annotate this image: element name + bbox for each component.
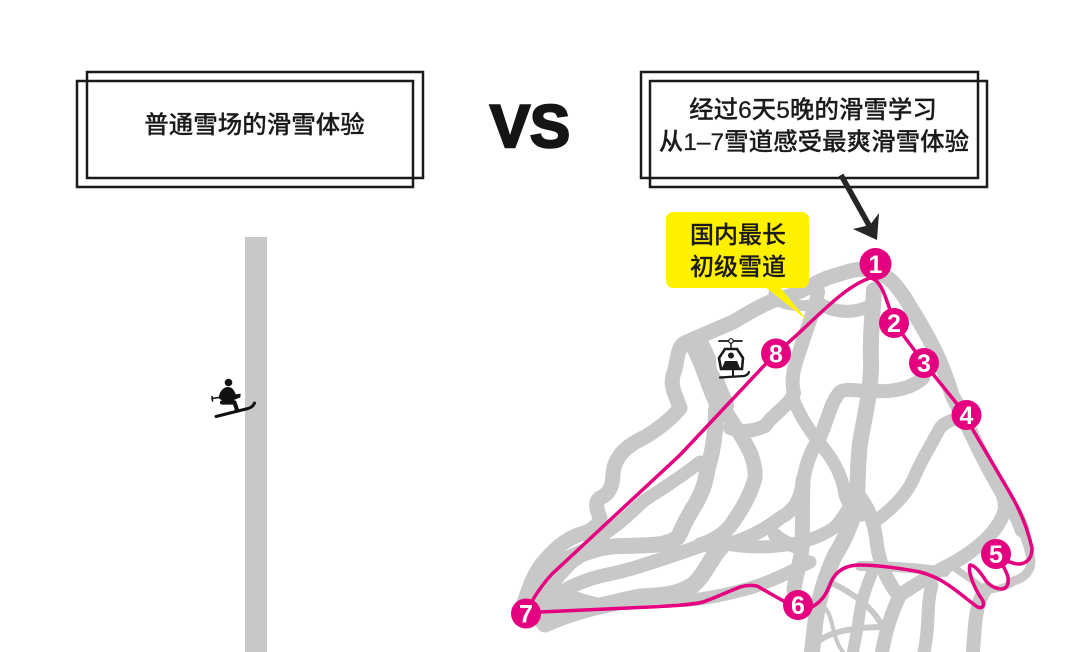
marker 4 [952,400,982,430]
panel: ordinary ski resort heading [77,72,423,187]
marker 8: 8 [769,340,783,368]
panel: six day course heading: 经过6天5晚的滑雪学习 [689,96,937,124]
marker 8 [761,338,791,368]
VS label: VS [490,93,570,160]
icon: gondola [716,339,749,381]
marker 3: 3 [917,350,931,378]
marker 7: 7 [519,600,533,628]
route: magenta ski route [526,278,1032,613]
callout: longest beginner trail: 初级雪道 [690,254,786,281]
marker 2: 2 [887,310,901,338]
marker 1: 1 [869,251,883,279]
marker 4: 4 [960,402,974,430]
panel: six day course heading [641,72,987,187]
marker 3 [909,348,939,378]
chart: ski trail network [523,269,1031,652]
panel: six day course heading: 从1–7雪道感受最爽滑雪体验 [659,128,969,156]
marker 5 [981,539,1011,569]
single grey ski slope [245,237,267,652]
marker 2 [879,308,909,338]
marker 1 [860,248,892,280]
marker 6: 6 [791,592,805,620]
marker 5: 5 [989,541,1003,569]
panel: ordinary ski resort heading: 普通雪场的滑雪体验 [144,111,365,139]
icon: skier [212,379,254,416]
marker 6 [783,590,813,620]
arrow: heading to trail start [841,175,879,240]
marker 7 [511,598,541,628]
callout: longest beginner trail [666,212,809,320]
route stop markers [511,248,1011,628]
callout: longest beginner trail: 国内最长 [690,222,786,249]
